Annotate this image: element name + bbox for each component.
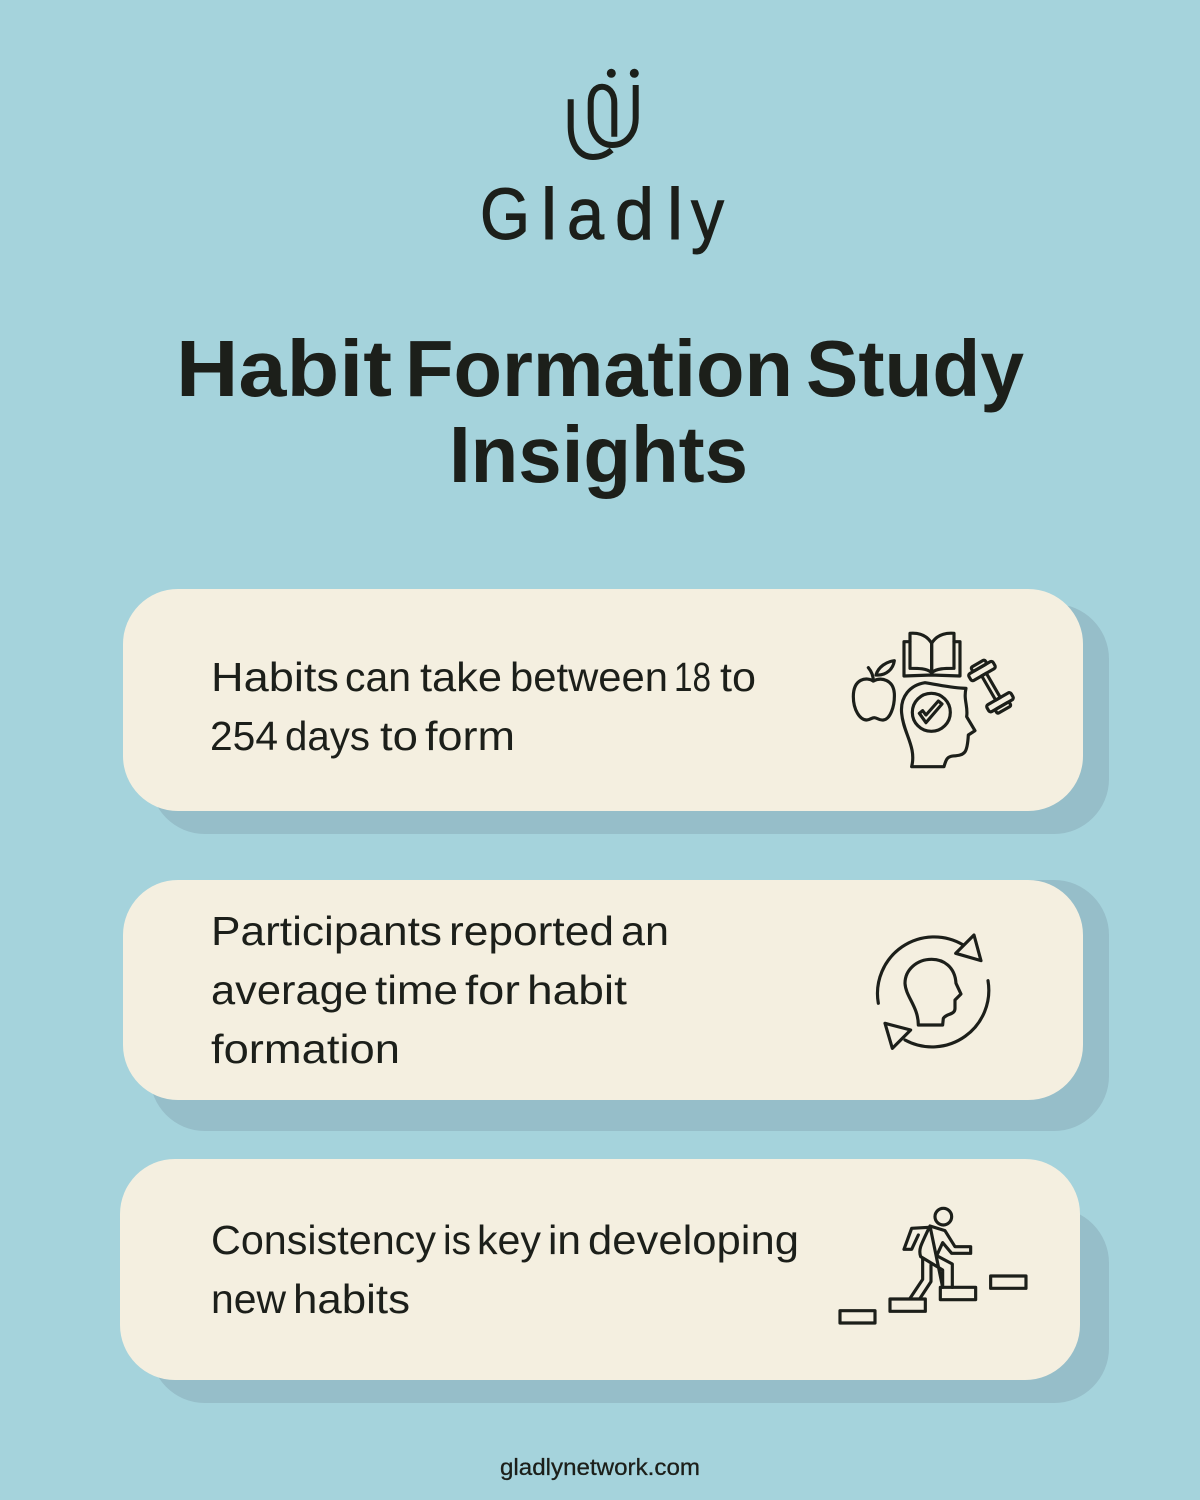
text: average time: an bbox=[621, 908, 669, 954]
text: average time bbox=[211, 908, 669, 1072]
text: habit duration: to bbox=[380, 713, 418, 759]
text: average time: average bbox=[211, 967, 368, 1013]
text: average time: habit bbox=[527, 967, 628, 1013]
text: habit duration: Habits bbox=[211, 654, 339, 700]
icon: person climbing steps bbox=[840, 1208, 1026, 1323]
text: habit duration: 18 bbox=[674, 654, 711, 700]
text: average time: Participants bbox=[211, 908, 442, 954]
panel: consistency bbox=[120, 1159, 1109, 1403]
text: consistency: new bbox=[211, 1276, 286, 1322]
text: habit duration bbox=[210, 654, 756, 759]
logo wordmark: l bbox=[541, 175, 557, 255]
text: consistency: Consistency bbox=[211, 1217, 436, 1263]
panel: habit duration bbox=[123, 589, 1109, 834]
logo wordmark: l bbox=[667, 175, 683, 255]
text: habit duration: between bbox=[510, 654, 668, 700]
icon: apple, book, dumbbell and head with check bbox=[853, 633, 1016, 767]
text: average time: reported bbox=[449, 908, 614, 954]
text: consistency: in bbox=[548, 1217, 581, 1263]
logo wordmark: a bbox=[567, 175, 605, 255]
logo wordmark: y bbox=[691, 175, 724, 255]
logo icon bbox=[571, 69, 639, 157]
text: habit duration: 254 bbox=[210, 713, 278, 759]
title: Habit bbox=[176, 324, 392, 413]
title: Study bbox=[806, 324, 1024, 413]
text: habit duration: can bbox=[345, 654, 411, 700]
title: Insights bbox=[449, 410, 748, 499]
title bbox=[176, 324, 1024, 499]
text: habit duration: form bbox=[425, 713, 515, 759]
text: consistency: is bbox=[443, 1217, 471, 1263]
text: average time: formation bbox=[211, 1026, 400, 1072]
text: habit duration: days bbox=[285, 713, 370, 759]
text: average time: for bbox=[465, 967, 520, 1013]
text: average time: time bbox=[375, 967, 458, 1013]
text: consistency: habits bbox=[293, 1276, 410, 1322]
logo wordmark: d bbox=[615, 175, 654, 255]
text: consistency: key bbox=[477, 1217, 541, 1263]
text: consistency: developing bbox=[588, 1217, 799, 1263]
logo wordmark: G bbox=[480, 175, 530, 255]
title: Formation bbox=[405, 324, 793, 413]
text: consistency bbox=[211, 1217, 799, 1322]
text: habit duration: take bbox=[420, 654, 502, 700]
footer website: gladlynetwork.com bbox=[500, 1454, 700, 1480]
icon: head with circular arrows bbox=[877, 935, 989, 1048]
panel: average time bbox=[123, 880, 1109, 1131]
text: habit duration: to bbox=[720, 654, 756, 700]
